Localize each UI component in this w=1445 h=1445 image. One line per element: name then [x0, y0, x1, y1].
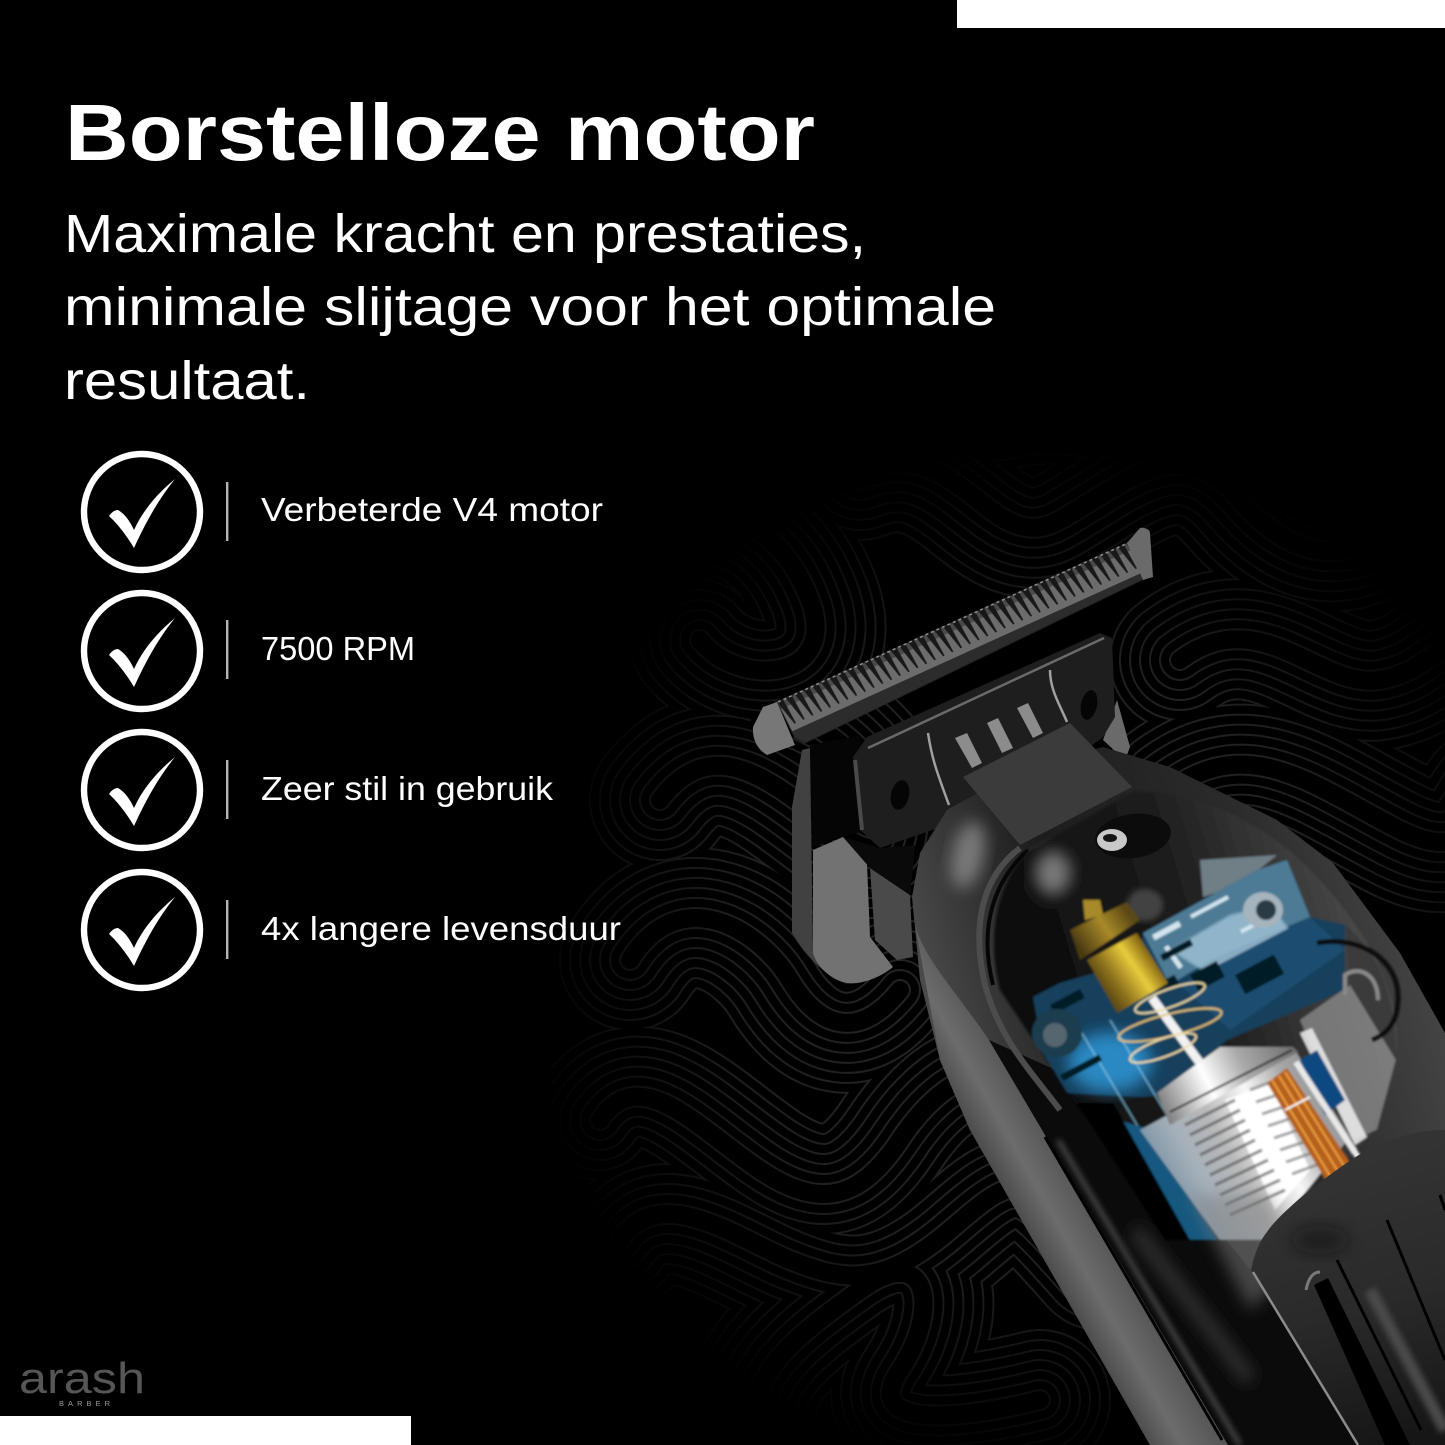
grip ribs	[1292, 1195, 1445, 1445]
left side band	[915, 925, 1228, 1445]
cylinder hatching	[1185, 1075, 1330, 1215]
feature: 4x langere levensduur	[84, 872, 621, 988]
gold shaft	[1070, 900, 1200, 1063]
blue strip beside cylinder	[1118, 1120, 1218, 1240]
guard plate	[853, 633, 1115, 848]
dark lower strip	[989, 1040, 1360, 1445]
white bar: bottom left	[0, 1416, 411, 1445]
blue machinery	[1032, 860, 1345, 1130]
haze under window	[1190, 1195, 1300, 1310]
logo: BARBER	[59, 1399, 111, 1408]
orange coil	[1267, 1062, 1360, 1187]
subtitle text block: resultaat.	[64, 351, 310, 411]
silver motor cylinder	[1140, 1047, 1350, 1240]
title: Borstelloze motor	[65, 88, 815, 177]
feature: Verbeterde V4 motor	[84, 454, 603, 570]
window rim	[979, 848, 1060, 1110]
top block	[963, 723, 1132, 845]
plate springs	[928, 670, 1067, 805]
window interior	[994, 792, 1398, 1240]
feature: Zeer stil in gebruik	[84, 732, 554, 848]
blade	[753, 528, 1153, 755]
clipper body	[912, 747, 1445, 1445]
feature: Verbeterde V4 motor: Verbeterde V4 motor	[261, 491, 603, 528]
shoulder highlight	[945, 818, 991, 892]
side mark and cable	[1345, 971, 1378, 1000]
feature: 7500 RPM	[84, 593, 415, 709]
white bar: top right	[957, 0, 1445, 28]
subtitle text block: minimale slijtage voor het optimale	[64, 277, 996, 337]
grip section	[1251, 1130, 1445, 1445]
subtitle text block	[64, 204, 996, 411]
wavy background pattern	[600, 410, 1445, 1440]
logo: arash	[19, 1354, 145, 1403]
feature: Zeer stil in gebruik: Zeer stil in gebruik	[261, 770, 554, 807]
side bracket	[792, 700, 1130, 983]
feature: 4x langere levensduur: 4x langere levensduur	[261, 910, 621, 947]
feature: 7500 RPM: 7500 RPM	[261, 630, 415, 667]
power button	[1092, 809, 1174, 863]
rotation rings	[1116, 977, 1224, 1068]
plate slots	[955, 703, 1043, 768]
subtitle text block: Maximale kracht en prestaties,	[64, 204, 866, 264]
right glass highlight	[1300, 985, 1396, 1140]
feature list	[84, 454, 621, 988]
trimmer illustration	[753, 528, 1445, 1445]
